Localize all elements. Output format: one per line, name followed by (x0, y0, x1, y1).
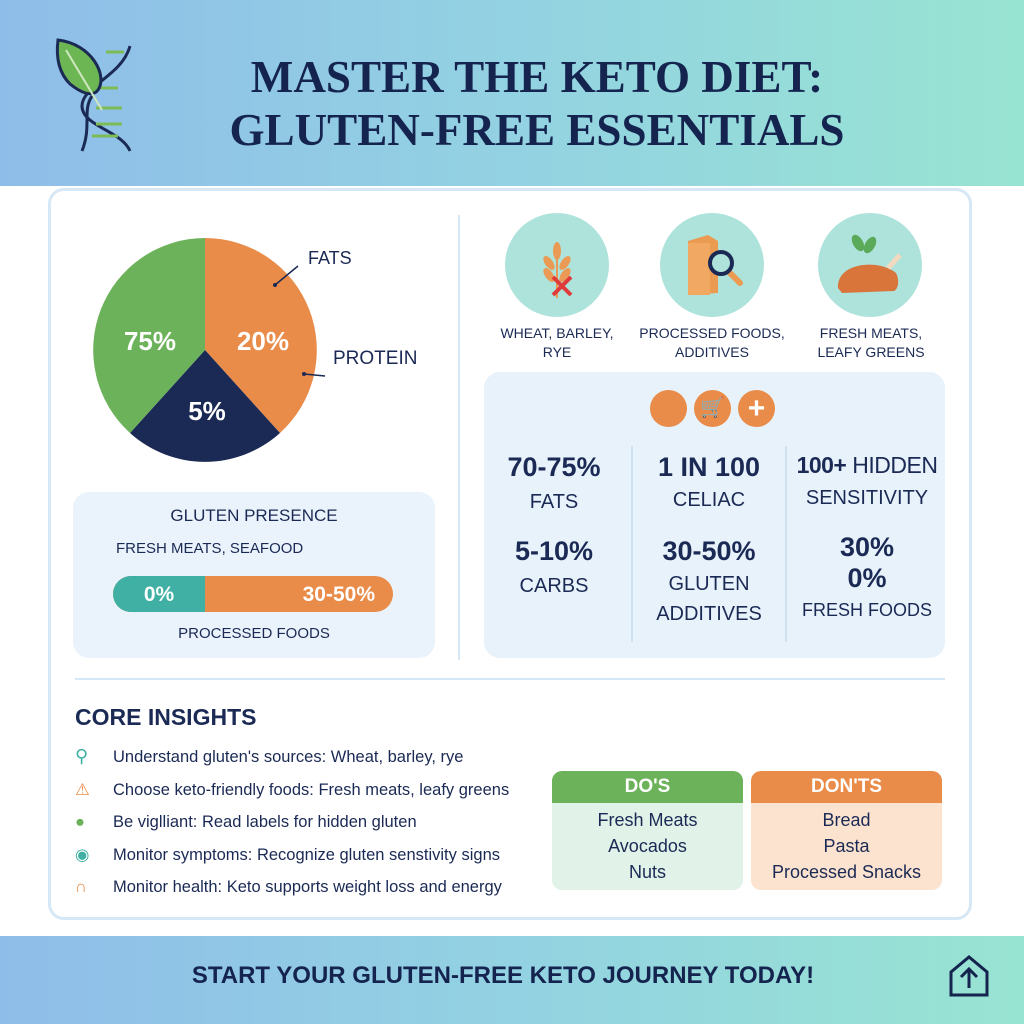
core insights: ⚲ (75, 746, 88, 766)
core insights: Monitor health: Keto supports weight loss and energy (113, 878, 502, 896)
stat col 2: GLUTEN (668, 573, 750, 595)
title: GLUTEN-FREE ESSENTIALS (229, 104, 845, 155)
stat col 3: 100+ HIDDEN (797, 452, 937, 478)
stat col 3: FRESH FOODS (802, 600, 932, 620)
icons row: LEAFY GREENS (817, 344, 925, 360)
panel: dos (552, 771, 743, 890)
pie chart (93, 238, 417, 462)
footer: START YOUR GLUTEN-FREE KETO JOURNEY TODAY! (192, 962, 814, 989)
bar (113, 576, 393, 612)
stat col 3 (797, 452, 937, 620)
core insights: ∩ (75, 878, 87, 896)
stat col 1 (507, 452, 601, 597)
panel: stats (484, 372, 945, 658)
panel: dos: Nuts (629, 862, 666, 882)
bar: 0% (144, 583, 174, 606)
icon labels: RYE (543, 344, 571, 360)
heading: CORE INSIGHTS (75, 704, 256, 730)
core insights: Choose keto-friendly foods: Fresh meats, leafy greens (113, 780, 509, 798)
small orange icons: 🛒 (700, 397, 725, 419)
stat col 2: CELIAC (673, 489, 745, 511)
panel: gluten presence (73, 492, 435, 658)
stat col 3: 0% (847, 563, 887, 593)
pie chart: 20% (237, 326, 289, 356)
icons row: ADDITIVES (675, 344, 749, 360)
stat col 2: ADDITIVES (656, 603, 762, 625)
stat col 1: 5-10% (515, 536, 593, 566)
panel: donts: Processed Snacks (772, 862, 921, 882)
stat col 1: CARBS (520, 575, 588, 597)
stat col 2 (656, 452, 762, 625)
pie chart: 75% (124, 326, 176, 356)
footer (0, 936, 1024, 1024)
panel: donts: Pasta (823, 836, 870, 856)
bar: 30-50% (303, 583, 375, 606)
icons row (500, 213, 925, 360)
icon: wheat (505, 213, 609, 317)
panel: donts (751, 771, 942, 890)
title: MASTER THE KETO DIET: (251, 51, 823, 102)
panel: dos: Fresh Meats (597, 810, 698, 830)
panel: dos: Avocados (608, 836, 687, 856)
stat col 3: 30% (840, 532, 894, 562)
header (0, 0, 1024, 186)
icons row: PROCESSED FOODS, (639, 325, 785, 341)
icon: dna leaf (56, 38, 132, 152)
panel: gluten presence: FRESH MEATS, SEAFOOD (116, 540, 303, 557)
icon: house arrow (950, 955, 988, 996)
panel: gluten presence: GLUTEN PRESENCE (170, 506, 338, 525)
icon: chicken (818, 213, 922, 317)
core insights: Understand gluten's sources: Wheat, barley, rye (113, 748, 463, 766)
icons row: FRESH MEATS, (820, 325, 922, 341)
panel: dos: DO'S (625, 776, 670, 797)
core insights (75, 704, 509, 896)
core insights: Be viglliant: Read labels for hidden gluten (113, 813, 417, 831)
icon labels (500, 325, 614, 360)
main card (48, 188, 972, 920)
small orange icons: + (748, 392, 765, 425)
stat col 1: 70-75% (507, 452, 601, 482)
stat col 2: 30-50% (662, 536, 756, 566)
pie chart: FATS (308, 248, 352, 268)
stat col 3: SENSITIVITY (806, 487, 928, 509)
pie chart: 5% (188, 396, 226, 426)
stat col 1: FATS (530, 491, 578, 513)
core insights: Monitor symptoms: Recognize gluten senstivity signs (113, 846, 500, 864)
core insights: ⚠ (75, 780, 90, 798)
panel: gluten presence: PROCESSED FOODS (178, 625, 330, 642)
icon: box magnifier (660, 213, 764, 317)
icon labels: WHEAT, BARLEY, (500, 325, 614, 341)
panel: donts: Bread (822, 810, 871, 830)
core insights: ◉ (75, 846, 89, 864)
title (229, 51, 845, 155)
pie chart: PROTEIN (333, 348, 417, 369)
core insights: ● (75, 813, 85, 831)
stat col 2: 1 IN 100 (658, 452, 760, 482)
panel: donts: DON'TS (811, 776, 882, 797)
small orange icons (650, 390, 775, 427)
